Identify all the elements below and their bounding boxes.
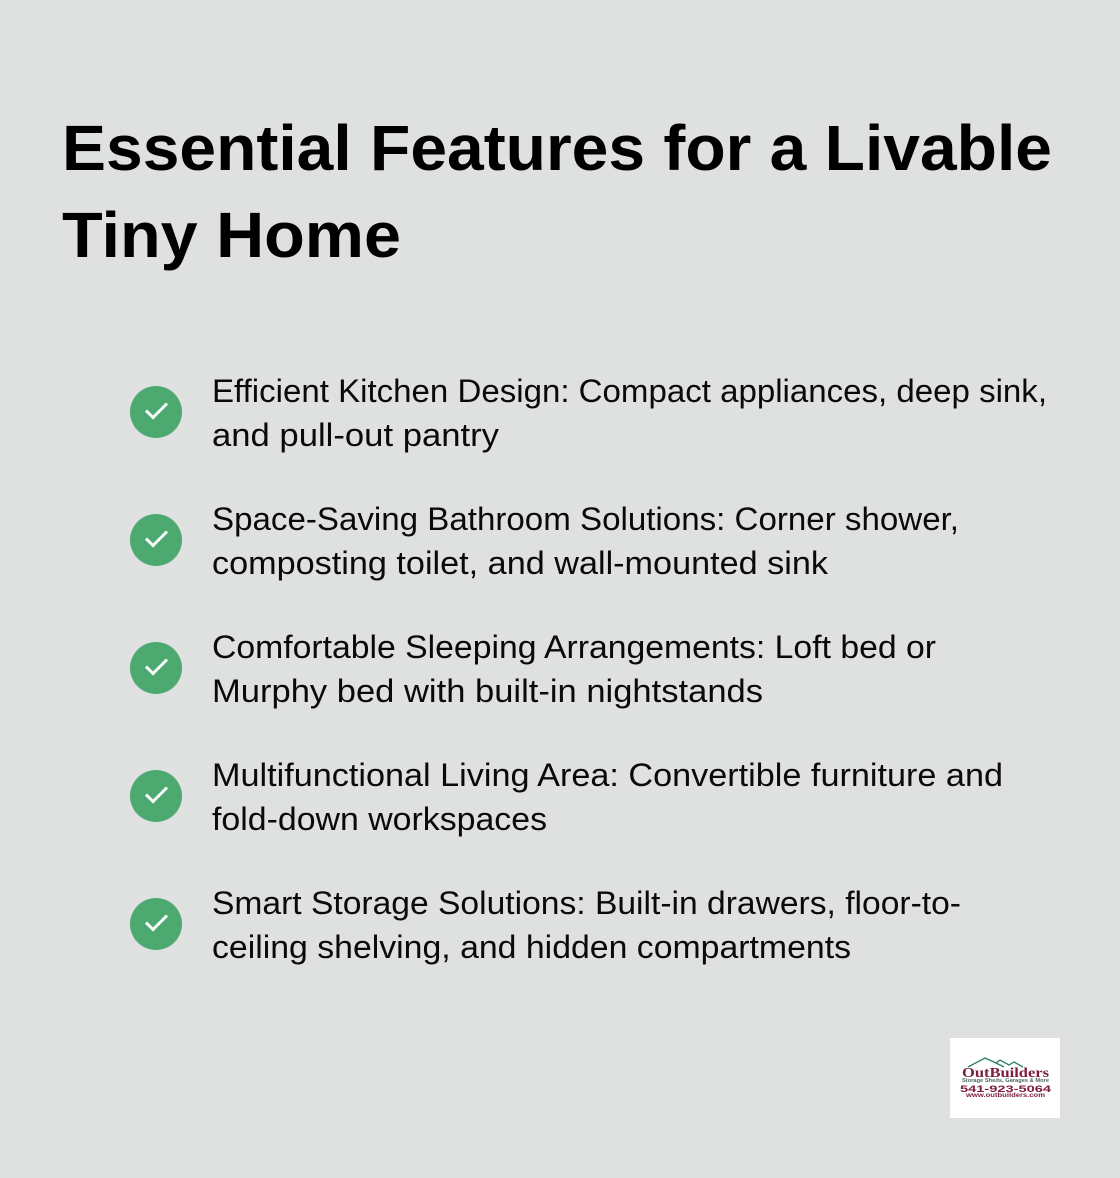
text: kitchen design (212, 373, 1047, 453)
text: sleeping arrangements: Comfortable Sleeping Arrangements: Loft bed or (212, 629, 936, 665)
text: sleeping arrangements: Murphy bed with built-in nightstands (212, 673, 763, 709)
logo: OutBuilders (950, 1038, 1060, 1118)
text: living area: fold-down workspaces (212, 801, 547, 837)
logo phone: 541-923-5064 (960, 1084, 1052, 1095)
text: bathroom solutions (212, 501, 959, 581)
item: kitchen design (130, 373, 1047, 453)
icon: green check circle (130, 386, 182, 438)
text: kitchen design: and pull-out pantry (212, 417, 499, 453)
logo tagline: Storage Sheds, Garages & More (962, 1078, 1049, 1084)
title: Essential Features for a Livable (62, 112, 1052, 184)
text: storage solutions: Smart Storage Solutions: Built-in drawers, floor-to- (212, 885, 961, 921)
text: bathroom solutions: composting toilet, and wall-mounted sink (212, 545, 829, 581)
icon: house rooflines (968, 1058, 1023, 1067)
feature list (130, 373, 1047, 965)
text: living area (212, 757, 1003, 837)
item: bathroom solutions (130, 501, 959, 581)
icon: green check circle (130, 898, 182, 950)
title (62, 112, 1052, 271)
item: sleeping arrangements (130, 629, 936, 709)
text: storage solutions (212, 885, 961, 965)
text: kitchen design: Efficient Kitchen Design: Compact appliances, deep sink, (212, 373, 1047, 409)
item: storage solutions (130, 885, 961, 965)
title: Tiny Home (62, 199, 401, 271)
text: bathroom solutions: Space-Saving Bathroom Solutions: Corner shower, (212, 501, 959, 537)
text: sleeping arrangements (212, 629, 936, 709)
icon: green check circle (130, 642, 182, 694)
item: living area (130, 757, 1003, 837)
icon: green check circle (130, 770, 182, 822)
logo name: OutBuilders (962, 1066, 1050, 1081)
text: storage solutions: ceiling shelving, and hidden compartments (212, 929, 851, 965)
logo url: www.outbuilders.com (965, 1093, 1045, 1099)
text: living area: Multifunctional Living Area: Convertible furniture and (212, 757, 1003, 793)
icon: green check circle (130, 514, 182, 566)
